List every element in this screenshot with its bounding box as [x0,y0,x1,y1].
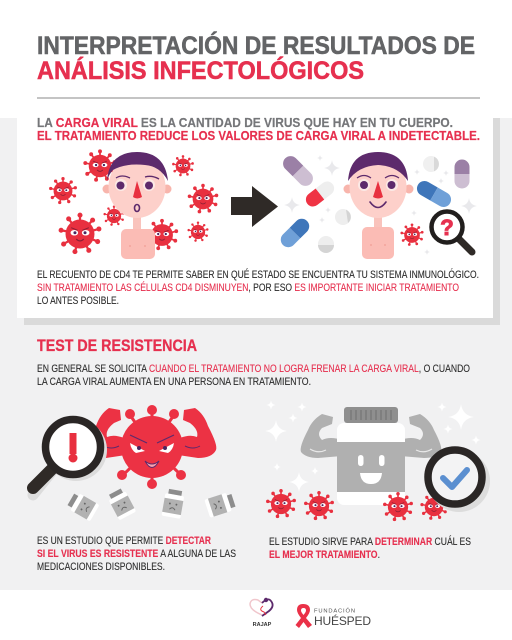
resistance intro paragraph: EN GENERAL SE SOLICITA CUANDO EL TRATAMIENTO NO LOGRA FRENAR LA CARGA VIRAL, O CUANDO [37,363,470,375]
title: INTERPRETACIÓN DE RESULTADOS DE [37,30,475,60]
logo: Fundación Huésped: FUNDACIÓN [314,608,355,614]
CD4 paragraph [37,268,479,307]
gray page background [0,118,512,590]
illustration: sick person surrounded by viruses [49,149,218,259]
illustration: healthy person with pills: ? [440,215,454,240]
text: detectar resistencia: MEDICACIONES DISPONIBLES. [37,561,165,573]
intro text: carga viral [37,116,480,143]
logo: Fundación Huésped [296,604,371,628]
text: detectar resistencia: ES UN ESTUDIO QUE PERMITE DETECTAR [37,535,211,547]
logo: RAJAP [250,598,273,628]
CD4 paragraph: SIN TRATAMIENTO LAS CÉLULAS CD4 DISMINUYEN, POR ESO ES IMPORTANTE INICIAR TRATAMIENTO [37,281,459,294]
text: determinar tratamiento: EL ESTUDIO SIRVE PARA DETERMINAR CUÁL ES [269,535,471,548]
text: detectar resistencia: SI EL VIRUS ES RESISTENTE A ALGUNA DE LAS [37,548,236,560]
text: determinar tratamiento: EL MEJOR TRATAMIENTO. [269,549,380,561]
title [37,30,475,85]
panel shadow [24,118,500,325]
resistance intro paragraph: LA CARGA VIRAL AUMENTA EN UNA PERSONA EN TRATAMIENTO. [37,376,311,388]
text: determinar tratamiento [269,535,471,561]
illustration: healthy person with pills [278,152,477,259]
text: detectar resistencia [37,535,236,573]
CD4 paragraph: LO ANTES POSIBLE. [37,295,119,307]
intro text: carga viral: EL TRATAMIENTO REDUCE LOS VALORES DE CARGA VIRAL A INDETECTABLE. [37,129,480,143]
illustration: strong virus with magnifier [33,406,236,521]
resistance intro paragraph [37,363,470,388]
heading: test de resistencia: TEST DE RESISTENCIA [37,337,197,355]
logo: Fundación Huésped: HUÉSPED [314,613,371,628]
arrow [231,186,278,227]
title: ANÁLISIS INFECTOLÓGICOS [37,55,364,85]
illustration: strong medication bottle with check [265,400,490,521]
intro text: carga viral: LA CARGA VIRAL ES LA CANTIDAD DE VIRUS QUE HAY EN TU CUERPO. [37,116,453,130]
logo: RAJAP: RAJAP [253,622,272,628]
panel: carga viral [17,100,493,318]
